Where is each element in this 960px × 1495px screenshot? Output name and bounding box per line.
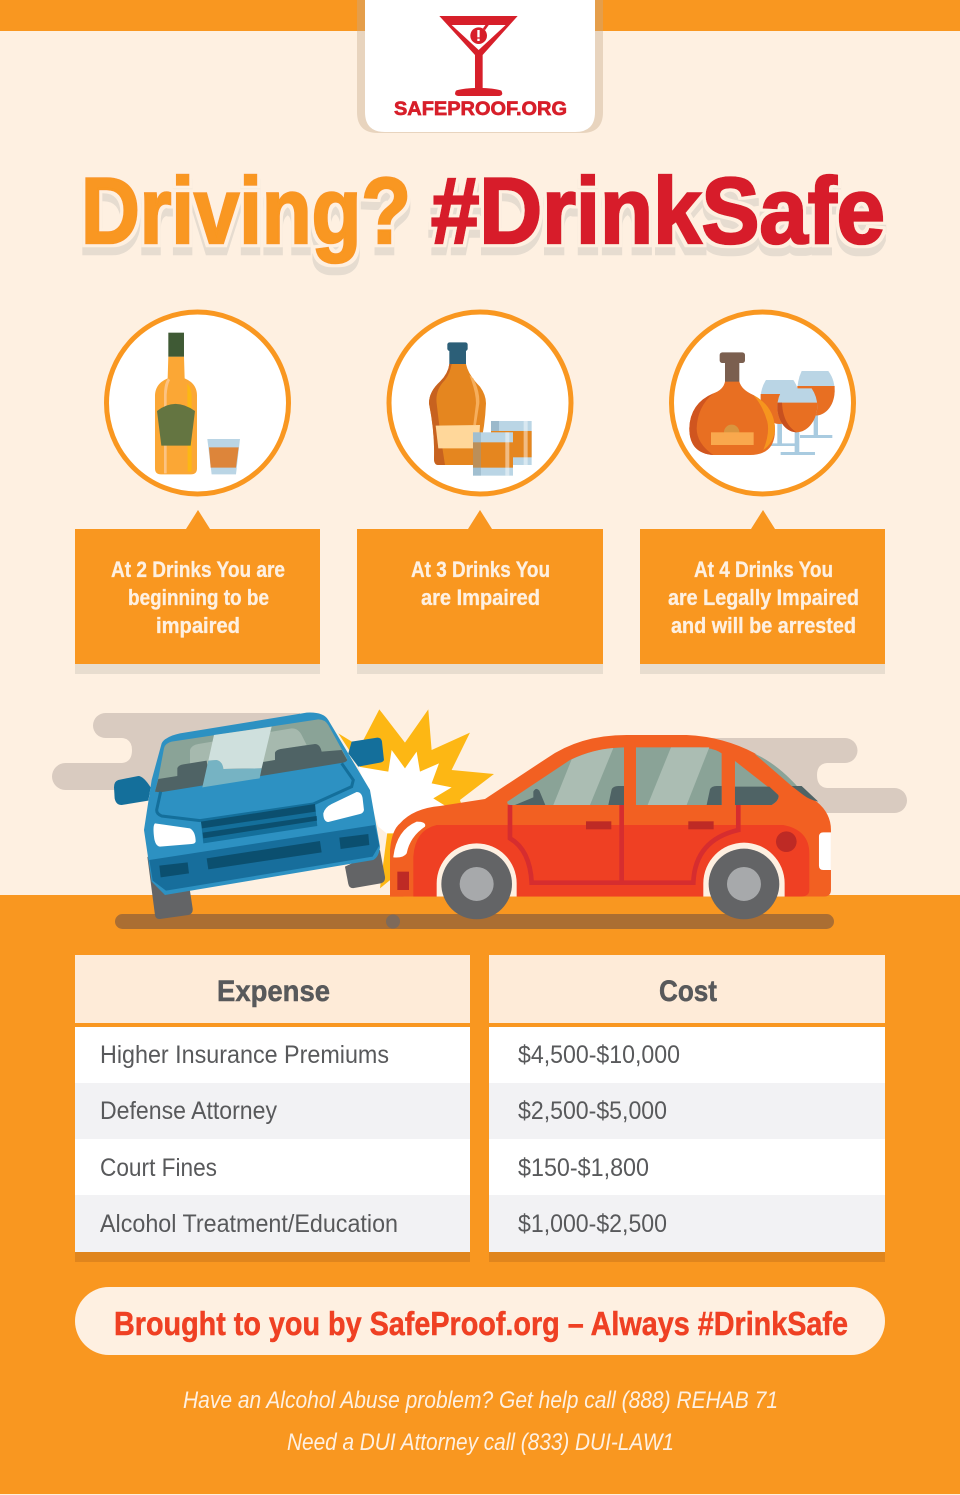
table column: expense: Court Fines xyxy=(100,1154,217,1182)
panel: logo card xyxy=(357,0,603,133)
smoke: left xyxy=(52,713,300,790)
table column: expense: Alcohol Treatment/Education xyxy=(100,1210,398,1238)
callout: at 3 drinks: are Impaired xyxy=(421,585,540,610)
table column: cost: $4,500-$10,000 xyxy=(518,1041,680,1069)
callout: at 4 drinks xyxy=(640,510,885,674)
title xyxy=(81,158,885,263)
circle: three drinks xyxy=(389,312,571,494)
cost header: Cost xyxy=(659,975,717,1008)
callout: at 4 drinks: are Legally Impaired xyxy=(668,585,859,610)
icon: whiskey bottle and two tumblers xyxy=(429,342,532,476)
illustration: collision burst xyxy=(338,709,494,888)
callout: at 3 drinks: At 3 Drinks You xyxy=(411,557,550,582)
footer help lines xyxy=(183,1387,778,1456)
icon: tall bottle and shot glass xyxy=(155,333,240,474)
footer help lines: Need a DUI Attorney call (833) DUI-LAW1 xyxy=(287,1429,674,1456)
banner: brought to you by: Brought to you by SafeProof.org – Always #DrinkSafe xyxy=(114,1305,848,1342)
expense header xyxy=(75,955,470,1023)
table column: cost: $2,500-$5,000 xyxy=(518,1097,667,1125)
title: #DrinkSafe xyxy=(431,158,885,263)
circle: two drinks xyxy=(106,312,288,494)
callout: at 2 drinks: impaired xyxy=(156,613,240,638)
table column: cost: $150-$1,800 xyxy=(518,1154,649,1182)
title: Driving? xyxy=(81,158,411,263)
callout: at 3 drinks xyxy=(357,510,603,674)
callout: at 4 drinks: At 4 Drinks You xyxy=(694,557,833,582)
table column: cost xyxy=(489,955,885,1262)
table column: expense: Higher Insurance Premiums xyxy=(100,1041,389,1069)
top orange band xyxy=(0,0,960,31)
footer help lines: Have an Alcohol Abuse problem? Get help call (888) REHAB 71 xyxy=(183,1387,778,1414)
smoke: right xyxy=(700,738,907,813)
expense header: Expense xyxy=(217,975,330,1008)
callout: at 4 drinks: and will be arrested xyxy=(671,613,856,638)
road shadow xyxy=(115,914,834,929)
cost header xyxy=(489,955,885,1023)
icon: cognac decanter and three snifters xyxy=(689,352,835,455)
icon: martini glass logo xyxy=(439,16,518,96)
illustration: blue car xyxy=(114,713,385,919)
logo wordmark: SAFEPROOF.ORG xyxy=(394,98,567,120)
callout: at 2 drinks xyxy=(75,510,320,674)
table column: cost: $1,000-$2,500 xyxy=(518,1210,667,1238)
callout: at 2 drinks: beginning to be xyxy=(128,585,269,610)
callout: at 2 drinks: At 2 Drinks You are xyxy=(111,557,285,582)
table column: expense xyxy=(75,955,470,1262)
table column: expense: Defense Attorney xyxy=(100,1097,277,1125)
orange ground xyxy=(0,895,960,1494)
banner: brought to you by xyxy=(75,1287,885,1355)
illustration: red car xyxy=(390,735,837,919)
circle: four drinks xyxy=(672,312,854,494)
